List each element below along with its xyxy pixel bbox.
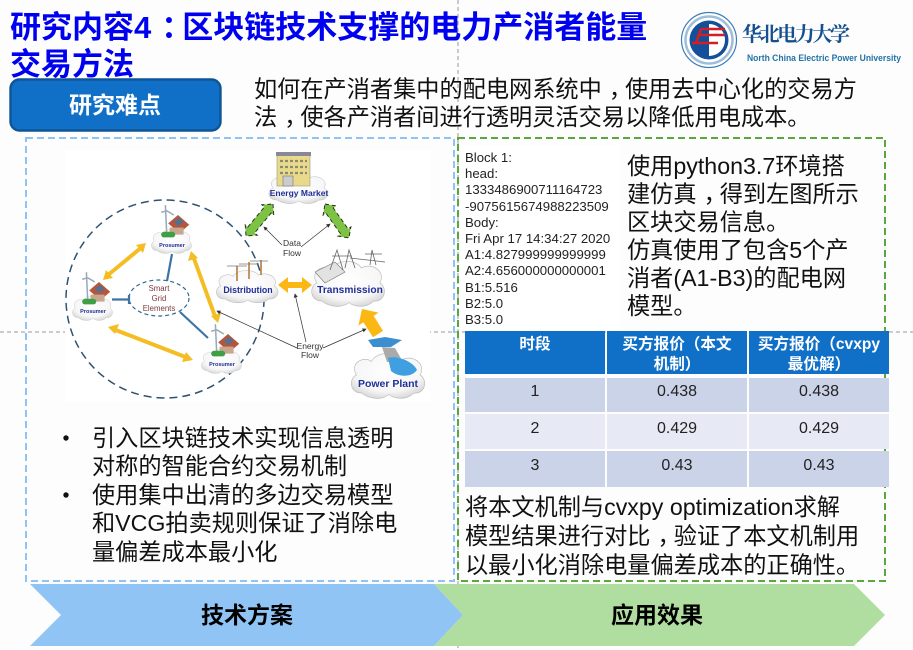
results table: 0.43 — [803, 457, 835, 474]
smart grid elements: Elements — [143, 304, 175, 313]
solution bullets: 使用集中出清的多边交易模型 — [92, 482, 393, 508]
results table: 买方报价（cvxpy — [758, 334, 880, 353]
block transaction log: 1333486900711164723 — [465, 182, 602, 197]
results table: 最优解） — [788, 355, 850, 373]
diagram: energy network: Prosumer — [209, 362, 236, 368]
results table: 时段 — [519, 334, 551, 353]
simulation description: 建仿真 ，得到左图所示 — [627, 181, 859, 207]
block transaction log: Fri Apr 17 14:34:27 2020 — [465, 231, 610, 246]
results table — [465, 331, 889, 487]
block transaction log: head: — [465, 166, 498, 181]
simulation description: 区块交易信息。 — [627, 209, 789, 235]
diagram: energy network: Prosumer — [80, 309, 107, 315]
comparison conclusion: 模型结果进行对比 ，验证了本文机制用 — [465, 523, 859, 549]
arrow: 应用效果: 应用效果 — [611, 602, 703, 628]
research difficulty text: 如何在产消者集中的配电网系统中 ，使用去中心化的交易方 — [254, 76, 857, 102]
block transaction log: B2:5.0 — [465, 296, 503, 311]
results table: 0.43 — [661, 457, 693, 474]
solution bullets: 对称的智能合约交易机制 — [92, 453, 347, 479]
button: 研究难点 — [10, 80, 220, 130]
results table: 0.429 — [657, 420, 697, 437]
arrows: data flow — [245, 204, 351, 238]
block transaction log: A1:4.827999999999999 — [465, 247, 606, 262]
block transaction log — [460, 145, 620, 330]
research difficulty text: 法 ，使各产消者间进行透明灵活交易以降低用电成本。 — [254, 104, 810, 130]
results table: 0.438 — [657, 383, 697, 400]
results table: 3 — [531, 457, 540, 474]
block transaction log: Block 1: — [465, 150, 512, 165]
block transaction log: -9075615674988223509 — [465, 199, 609, 214]
results table: 0.429 — [799, 420, 839, 437]
smart grid elements — [112, 254, 208, 338]
smart grid elements: Grid — [152, 294, 166, 303]
energy market: Energy Market — [270, 188, 328, 198]
simulation description: 模型。 — [627, 293, 697, 319]
solution bullets: 引入区块链技术实现信息透明 — [92, 425, 393, 451]
button: 研究难点: 研究难点 — [69, 92, 161, 118]
flow labels with leader arrows: Flow — [301, 350, 320, 360]
smart grid elements: Smart — [149, 284, 170, 293]
power plant — [351, 337, 425, 398]
arrows: prosumer energy flows — [103, 243, 221, 362]
solution bullets — [63, 425, 397, 565]
arrows: energy flow — [278, 277, 383, 337]
results table: 2 — [531, 420, 540, 437]
solution bullets: 量偏差成本最小化 — [92, 539, 278, 565]
results table: 买方报价（本文 — [622, 334, 732, 353]
title: 交易方法 — [10, 47, 134, 82]
panel: technical solution — [26, 138, 454, 581]
logo: North China Electric Power University: North China Electric Power University — [747, 53, 901, 63]
comparison conclusion: 将本文机制与cvxpy optimization求解 — [465, 494, 840, 520]
results table: 1 — [531, 383, 540, 400]
distribution — [216, 260, 278, 303]
block transaction log: B3:5.0 — [465, 312, 503, 327]
results table: 机制） — [654, 355, 700, 373]
simulation description — [627, 153, 859, 319]
block transaction log: B1:5.516 — [465, 280, 518, 295]
block transaction log: A2:4.656000000000001 — [465, 263, 606, 278]
block transaction log: Body: — [465, 215, 499, 230]
arrow: 技术方案: 技术方案 — [201, 602, 293, 628]
research difficulty text — [254, 76, 857, 130]
simulation description: 仿真使用了包含5个产 — [627, 237, 849, 263]
solution bullets: 和VCG拍卖规则保证了消除电 — [92, 510, 397, 536]
simulation description: 使用python3.7环境搭 — [627, 153, 845, 179]
logo: North China Electric Power University: 华北电力大学 — [742, 18, 850, 47]
flow labels with leader arrows: Data — [283, 238, 301, 248]
transmission — [312, 250, 385, 306]
title: 研究内容4 ：区块链技术支撑的电力产消者能量 — [10, 10, 647, 45]
energy market — [269, 152, 328, 204]
flow labels with leader arrows: Flow — [283, 248, 302, 258]
transmission: Transmission — [317, 285, 383, 296]
diagram: energy network — [65, 150, 430, 402]
flow labels with leader arrows: Energy — [297, 341, 324, 351]
panel: application results — [458, 138, 889, 581]
logo: North China Electric Power University — [682, 12, 901, 68]
arrow: 技术方案 — [30, 584, 463, 646]
power plant: Power Plant — [358, 378, 419, 390]
simulation description: 消者(A1-B3)的配电网 — [627, 265, 846, 291]
comparison conclusion — [465, 494, 859, 578]
comparison conclusion: 以最小化消除电量偏差成本的正确性。 — [465, 552, 859, 578]
icons: prosumer houses — [82, 205, 239, 356]
diagram: energy network: Prosumer — [159, 243, 186, 249]
title — [10, 10, 647, 82]
results table: 0.438 — [799, 383, 839, 400]
flow labels with leader arrows — [217, 224, 366, 360]
arrow: 应用效果 — [434, 584, 885, 646]
distribution: Distribution — [223, 285, 273, 295]
